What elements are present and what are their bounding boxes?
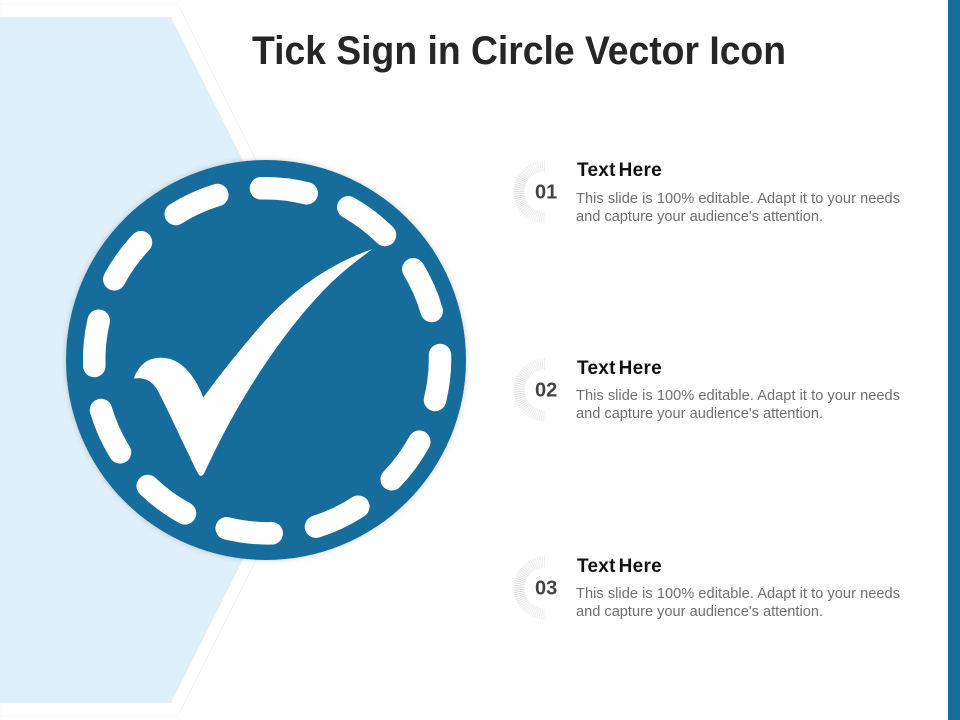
background hexagon panel [0, 17, 343, 703]
dashed white ring [94, 188, 440, 533]
description 03: and capture your audience's attention. [576, 604, 823, 620]
ring 03 [519, 562, 545, 614]
description 02: This slide is 100% editable. Adapt it to your needs [576, 388, 900, 404]
ring 01 [519, 166, 545, 218]
description 01: and capture your audience's attention. [576, 209, 823, 225]
item 03 [519, 556, 900, 620]
background hexagon outline [0, 4, 356, 716]
description 02: and capture your audience's attention. [576, 406, 823, 422]
description 03: This slide is 100% editable. Adapt it to your needs [576, 586, 900, 602]
number 01: 01 [535, 182, 557, 204]
number 02: 02 [535, 380, 557, 402]
ring 02 [519, 364, 545, 416]
heading 02: Text Here [577, 358, 662, 379]
right accent bar [948, 0, 960, 720]
white check mark [134, 249, 372, 476]
heading 03: Text Here [577, 556, 662, 577]
heading 01: Text Here [577, 160, 662, 181]
item 02 [519, 358, 900, 422]
description 01: This slide is 100% editable. Adapt it to your needs [576, 191, 900, 207]
title: Tick Sign in Circle Vector Icon [252, 29, 786, 73]
circle badge [66, 160, 466, 560]
number 03: 03 [535, 578, 557, 600]
item 01 [519, 160, 900, 225]
icon: tick in circle [66, 160, 466, 560]
